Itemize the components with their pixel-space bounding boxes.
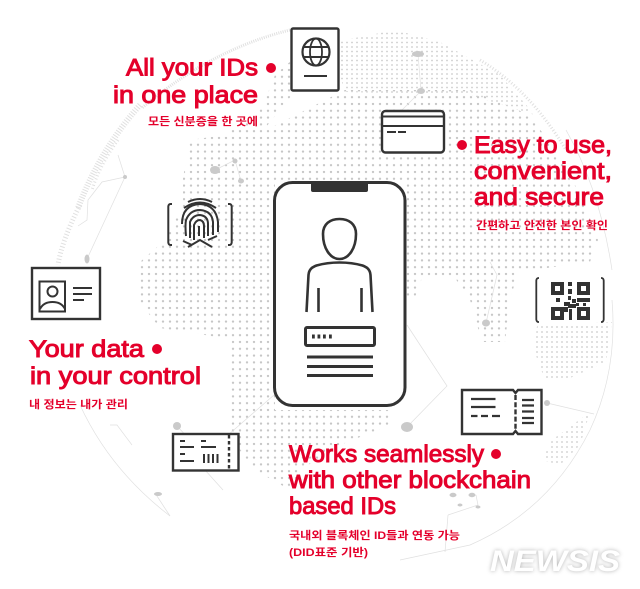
callout: works seamlessly: 국내외 블록체인 ID들과 연동 가능 [289,528,460,542]
icon: boarding pass [173,434,238,470]
icon: credit card [382,111,444,152]
callout: easy to use: Easy to use, [474,132,612,159]
callout: all your ids [113,54,276,128]
phone person [306,219,372,312]
icon: qr code [536,278,604,322]
icon: passport [292,28,338,90]
callout: all your ids: in one place [113,82,258,109]
bullet [266,63,276,73]
callout: works seamlessly: based IDs [289,493,396,520]
bullet [491,449,501,459]
icon: id card [32,268,100,319]
callout: works seamlessly [288,441,531,559]
globe nodes [84,51,550,508]
land masses dotted [138,30,612,490]
phone id field [306,328,374,346]
watermark: newsis: NEWSIS [490,545,620,578]
callout: your data: 내 정보는 내가 관리 [29,397,128,411]
icon: phone [274,182,405,406]
callout: easy to use [457,132,612,232]
callout: all your ids: All your IDs [126,54,258,82]
callout: works seamlessly: Works seamlessly [289,441,485,468]
globe arcs and links [58,30,613,560]
callout: all your ids: 모든 신분증을 한 곳에 [148,114,258,128]
bullet [457,140,467,150]
phone text lines [307,357,373,376]
callout: works seamlessly: (DID표준 기반) [289,545,368,559]
callout: easy to use: convenient, [474,158,612,185]
callout: works seamlessly: with other blockchain [288,467,531,494]
callout: your data: Your data [29,336,144,363]
callout: easy to use: and secure [474,184,604,211]
callout: your data: in your control [30,363,201,390]
bullet [152,344,162,354]
callout: your data [29,336,201,411]
globe background [58,30,613,560]
callout: easy to use: 간편하고 안전한 본인 확인 [476,218,608,232]
icon: fingerprint [168,199,232,247]
phone notch [311,182,368,192]
icon: ticket [462,390,542,434]
